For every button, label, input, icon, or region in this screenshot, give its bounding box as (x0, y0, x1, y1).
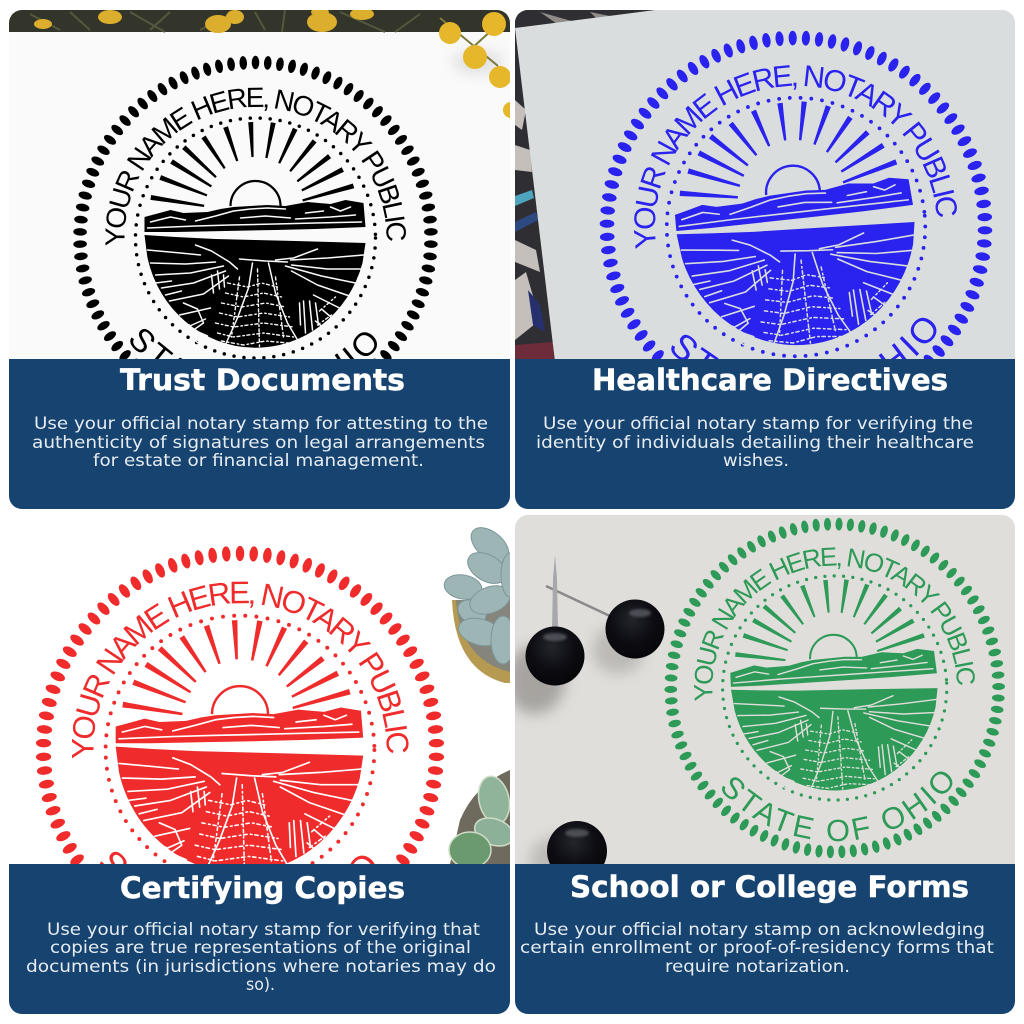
stamp: black Ohio seal: YOUR NAME HERE, NOTARY PUBLIC (106, 88, 406, 246)
panel: Certifying Copies (9, 527, 510, 1014)
description (520, 920, 994, 977)
stamp: red Ohio seal: STATE OF OHIO (100, 852, 375, 864)
description: Use your official notary stamp on acknowledging (534, 920, 985, 940)
description: identity of individuals detailing their healthcare (536, 433, 974, 453)
stamp: red Ohio seal: YOUR NAME HERE, NOTARY PUBLIC (72, 582, 409, 758)
description: so). (246, 975, 275, 995)
description: documents (in jurisdictions where notaries may do (26, 957, 496, 977)
description: Use your official notary stamp for verifying that (47, 920, 480, 940)
stamp: blue Ohio seal: YOUR NAME HERE, NOTARY PUBLIC (634, 65, 957, 249)
stamp: red Ohio seal (36, 546, 444, 864)
panel: Healthcare Directives (515, 10, 1015, 509)
description: wishes. (723, 451, 789, 471)
stamp: blue Ohio seal (600, 30, 992, 359)
panel: Trust Documents (9, 10, 510, 509)
heading: Trust Documents (120, 363, 405, 397)
heading: Certifying Copies (120, 871, 405, 905)
description (26, 920, 496, 995)
stamp: green Ohio seal: STATE OF OHIO (722, 772, 952, 842)
description: for estate or financial management. (93, 451, 424, 471)
photo: grey paper on floral fabric (515, 10, 1015, 370)
description: Use your official notary stamp for attesting to the (34, 414, 488, 434)
photo: white paper with mimosa sprigs (9, 10, 510, 118)
stamp: black Ohio seal (73, 56, 438, 359)
caption bar (515, 359, 1015, 509)
description: copies are true representations of the original (50, 938, 471, 958)
description: Use your official notary stamp for verifying the (543, 414, 973, 434)
heading: School or College Forms (570, 870, 969, 904)
photo: grey paper with black push pins (505, 515, 1015, 884)
caption bar (9, 359, 510, 509)
stamp: green Ohio seal (664, 518, 1005, 858)
panel: School or College Forms (515, 515, 1015, 1014)
caption bar (515, 864, 1015, 1014)
description: authenticity of signatures on legal arrangements (32, 433, 485, 453)
description: certain enrollment or proof-of-residency forms that (520, 938, 994, 958)
caption bar (9, 864, 510, 1014)
description (538, 416, 973, 466)
stamp: black Ohio seal: STATE OF OHIO (130, 328, 377, 359)
stamp: blue Ohio seal: STATE OF OHIO (671, 318, 936, 359)
heading: Healthcare Directives (592, 363, 948, 397)
description (32, 414, 488, 471)
photo: white surface with succulents (444, 527, 510, 864)
stamp: green Ohio seal: YOUR NAME HERE, NOTARY PUBLIC (694, 547, 975, 701)
description: require notarization. (665, 957, 850, 977)
